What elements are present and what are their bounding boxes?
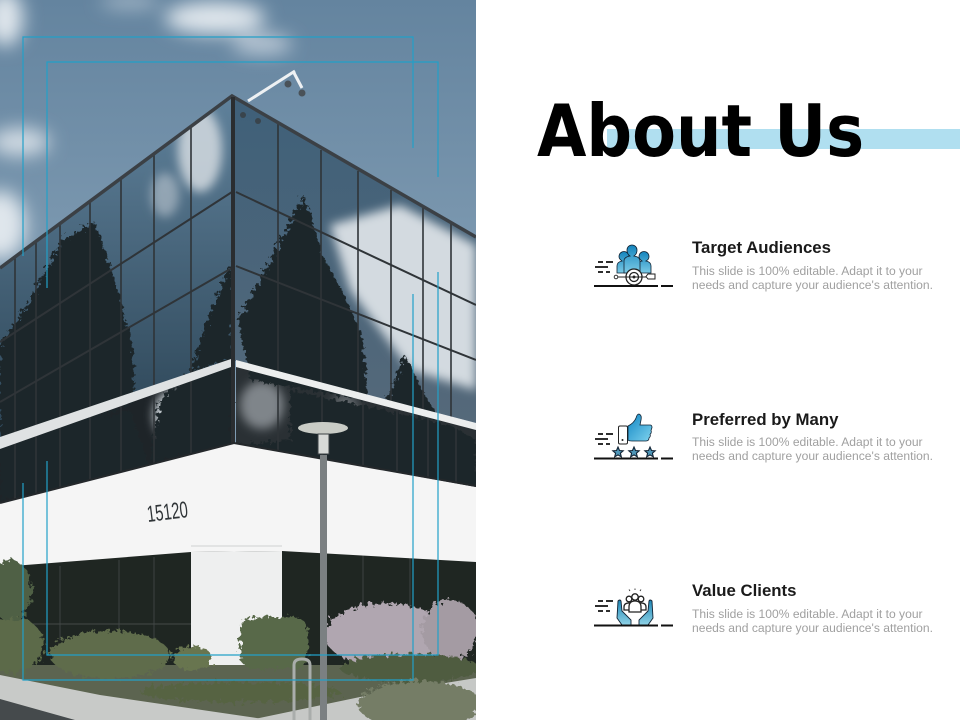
photo: glass office building: [0, 0, 476, 720]
text: preferred by many description: needs and capture your audience's attention.: [692, 449, 933, 463]
heading: preferred by many: Preferred by Many: [692, 410, 838, 429]
roof edge: [0, 96, 476, 268]
ground floor windows: [0, 540, 476, 670]
bollard: [294, 659, 310, 720]
decorative blue frames: [23, 37, 438, 680]
text: target audiences description: needs and capture your audience's attention.: [692, 278, 933, 292]
title highlight bar: [607, 129, 960, 149]
window mullions: [0, 123, 476, 500]
ground and sidewalk: [0, 665, 476, 720]
heading: target audiences: Target Audiences: [692, 238, 831, 257]
street lamp: [298, 422, 348, 720]
icon: hands holding people: [594, 588, 673, 626]
floor strip: [0, 359, 231, 449]
text: target audiences description: This slide is 100% editable. Adapt it to your: [692, 264, 923, 278]
title: About Us: [537, 89, 864, 173]
text: value clients description: needs and capture your audience's attention.: [692, 621, 933, 635]
heading: value clients: Value Clients: [692, 581, 796, 600]
building upper glass facade: [0, 96, 476, 505]
text: target audiences description: [692, 264, 933, 292]
shrubs and flowers: [0, 560, 482, 720]
text: preferred by many description: [692, 435, 933, 463]
white concrete band: [0, 443, 476, 675]
text: preferred by many description: This slide is 100% editable. Adapt it to your: [692, 435, 923, 449]
building number: 15120: [145, 496, 189, 527]
icon: target audiences: [594, 244, 673, 287]
text: value clients description: [692, 607, 933, 635]
sky: [0, 0, 476, 720]
text: value clients description: This slide is 100% editable. Adapt it to your: [692, 607, 923, 621]
camera mount: [240, 71, 306, 124]
icon: thumbs up with stars: [594, 414, 673, 460]
